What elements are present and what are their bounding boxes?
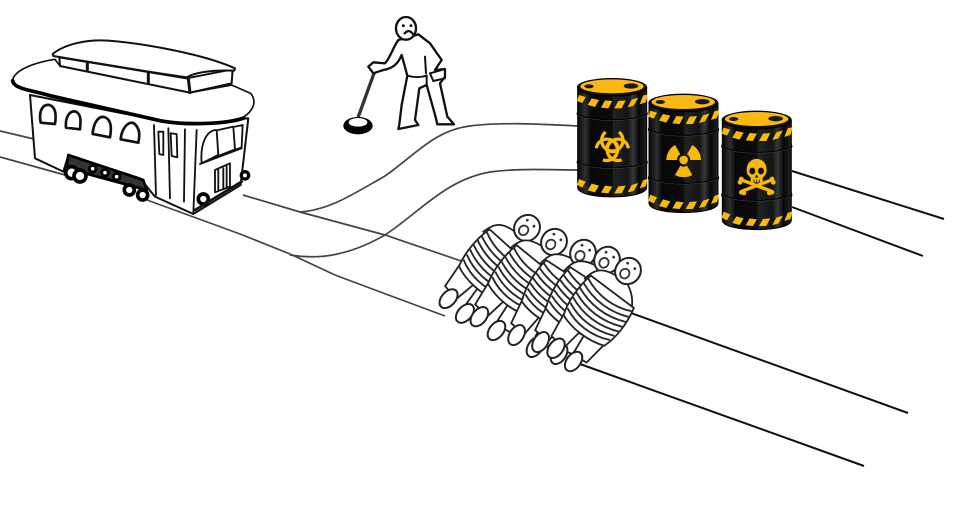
metal detector <box>343 73 374 134</box>
icon: biohazard <box>594 132 630 163</box>
person 3 <box>495 225 615 367</box>
person 2 <box>458 213 586 351</box>
barrel: biohazard <box>577 79 648 197</box>
people tied to the tracks <box>427 198 660 382</box>
person 5 <box>534 242 660 382</box>
tram door and front face <box>154 125 243 214</box>
man with metal detector <box>343 17 454 134</box>
tram wheels and bogie <box>66 155 249 204</box>
barrel: radiation <box>648 94 720 213</box>
tram body <box>30 95 248 214</box>
person 4 <box>519 232 639 374</box>
tram <box>13 40 254 214</box>
tram side windows <box>40 105 139 143</box>
icon: radiation <box>664 144 703 177</box>
tram clerestory <box>59 57 233 93</box>
tram upper roof <box>53 40 235 77</box>
track: lower line with branch to barrels <box>0 157 923 466</box>
man body <box>368 34 454 129</box>
person 1 <box>427 198 558 334</box>
track: upper line with branch to barrels <box>0 124 944 413</box>
icon: skull and crossbones <box>738 159 776 195</box>
barrels <box>577 79 793 230</box>
man head <box>396 17 416 40</box>
barrel: skull <box>722 111 793 230</box>
tram main roof <box>13 59 254 123</box>
